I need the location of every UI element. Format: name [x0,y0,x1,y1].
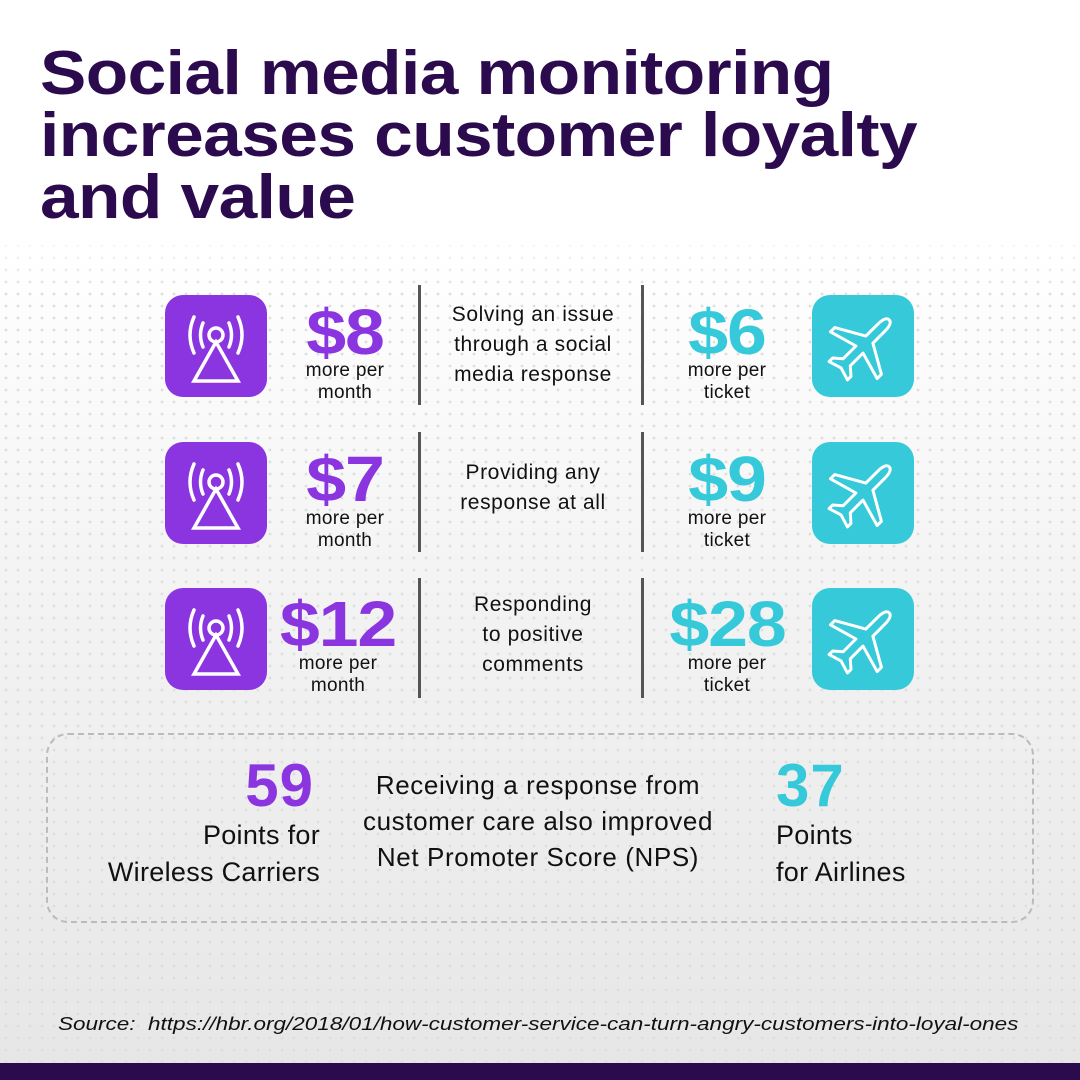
text: more per [299,653,377,674]
icon: radio tower [165,295,267,397]
text: Solving an issue [452,303,614,326]
text: to positive [482,623,584,646]
row 3 [165,578,914,698]
text: $28 [669,588,786,660]
text: more per [306,360,384,381]
stat: 59: 59 [245,752,314,819]
row 1 [165,285,914,405]
panel: NPS [46,733,1034,923]
text: comments [482,653,584,676]
text: customer care also improved [363,806,713,836]
text: month [318,530,372,551]
stat: 37: Points [776,820,853,850]
text [363,770,713,872]
stat: 59: Wireless Carriers [108,857,320,887]
title: and value [40,163,355,232]
text [460,461,606,514]
text: Net Promoter Score (NPS) [377,842,699,872]
text: $7 [306,443,384,515]
title [40,39,918,232]
icon: radio tower [165,442,267,544]
text: more per [688,360,766,381]
text [452,303,614,386]
text: response at all [460,491,606,514]
text: month [311,675,365,696]
icon: plane [812,588,914,690]
text: more per [306,508,384,529]
stat: 59 [108,752,320,887]
stat: 59: Points for [203,820,320,850]
text: media response [454,363,612,386]
row 2 [165,432,914,552]
text: ticket [704,382,750,403]
text: Receiving a response from [376,770,700,800]
icon: plane [812,442,914,544]
text: $6 [688,296,766,368]
title: increases customer loyalty [40,101,917,170]
text: ticket [704,675,750,696]
text: more per [688,653,766,674]
text: Responding [474,593,592,616]
text: through a social [454,333,612,356]
text [474,593,592,676]
text: $12 [280,588,396,660]
text: more per [688,508,766,529]
icon: radio tower [165,588,267,690]
text: ticket [704,530,750,551]
text: $9 [688,443,766,515]
source: Source: https://hbr.org/2018/01/how-customer-service-can-turn-angry-customers-into-loyal-ones [58,1014,1018,1034]
text: month [318,382,372,403]
stat: 37: 37 [776,752,845,819]
stat: 37 [776,752,906,887]
text: Providing any [465,461,601,484]
value: $8 [306,296,384,368]
stat: 37: for Airlines [776,857,906,887]
title: Social media monitoring [40,39,834,108]
bottom bar [0,1063,1080,1080]
icon: plane [812,295,914,397]
